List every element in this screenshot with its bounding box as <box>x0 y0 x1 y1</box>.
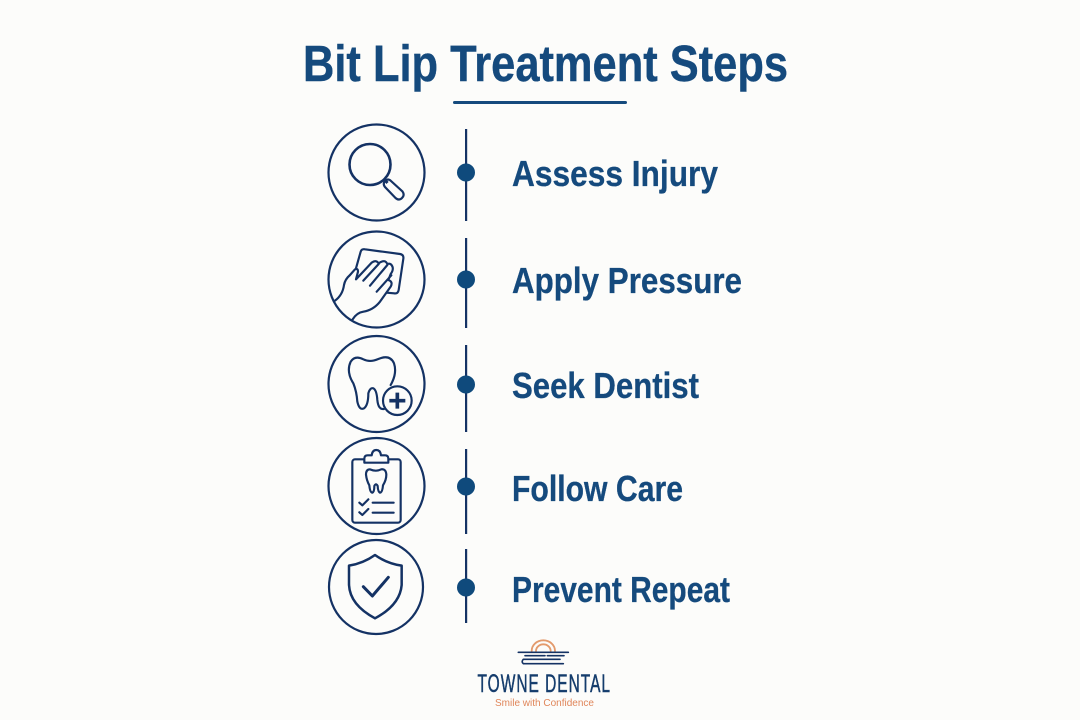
icon: shield with check <box>329 540 423 634</box>
timeline marker 5 <box>457 549 475 623</box>
logo tagline: Smile with Confidence <box>495 697 594 709</box>
title underline <box>453 101 627 104</box>
icon: dental clipboard <box>328 438 424 534</box>
step 1: assess injury <box>328 124 718 221</box>
logo wordmark: TOWNE DENTAL <box>478 670 611 698</box>
icon: tooth with plus <box>328 336 424 432</box>
label: seek dentist: Seek Dentist <box>512 365 699 406</box>
timeline marker 4 <box>457 449 475 534</box>
icon: magnifying glass <box>328 124 424 220</box>
label: assess injury: Assess Injury <box>512 153 718 194</box>
label: follow care: Follow Care <box>512 468 683 509</box>
step 4: follow care <box>328 438 683 534</box>
title: Bit Lip Treatment Steps <box>303 35 788 92</box>
icon: hand on gauze <box>328 232 424 328</box>
timeline marker 1 <box>457 129 475 221</box>
timeline marker 2 <box>457 238 475 328</box>
logo: towne dental <box>478 640 611 709</box>
label: prevent repeat: Prevent Repeat <box>512 569 730 610</box>
logo mark: sun and waves <box>518 640 568 664</box>
step 5: prevent repeat <box>329 540 730 634</box>
step 2: apply pressure <box>328 232 742 328</box>
step 3: seek dentist <box>328 336 699 432</box>
timeline marker 3 <box>457 345 475 432</box>
label: apply pressure: Apply Pressure <box>512 260 742 301</box>
